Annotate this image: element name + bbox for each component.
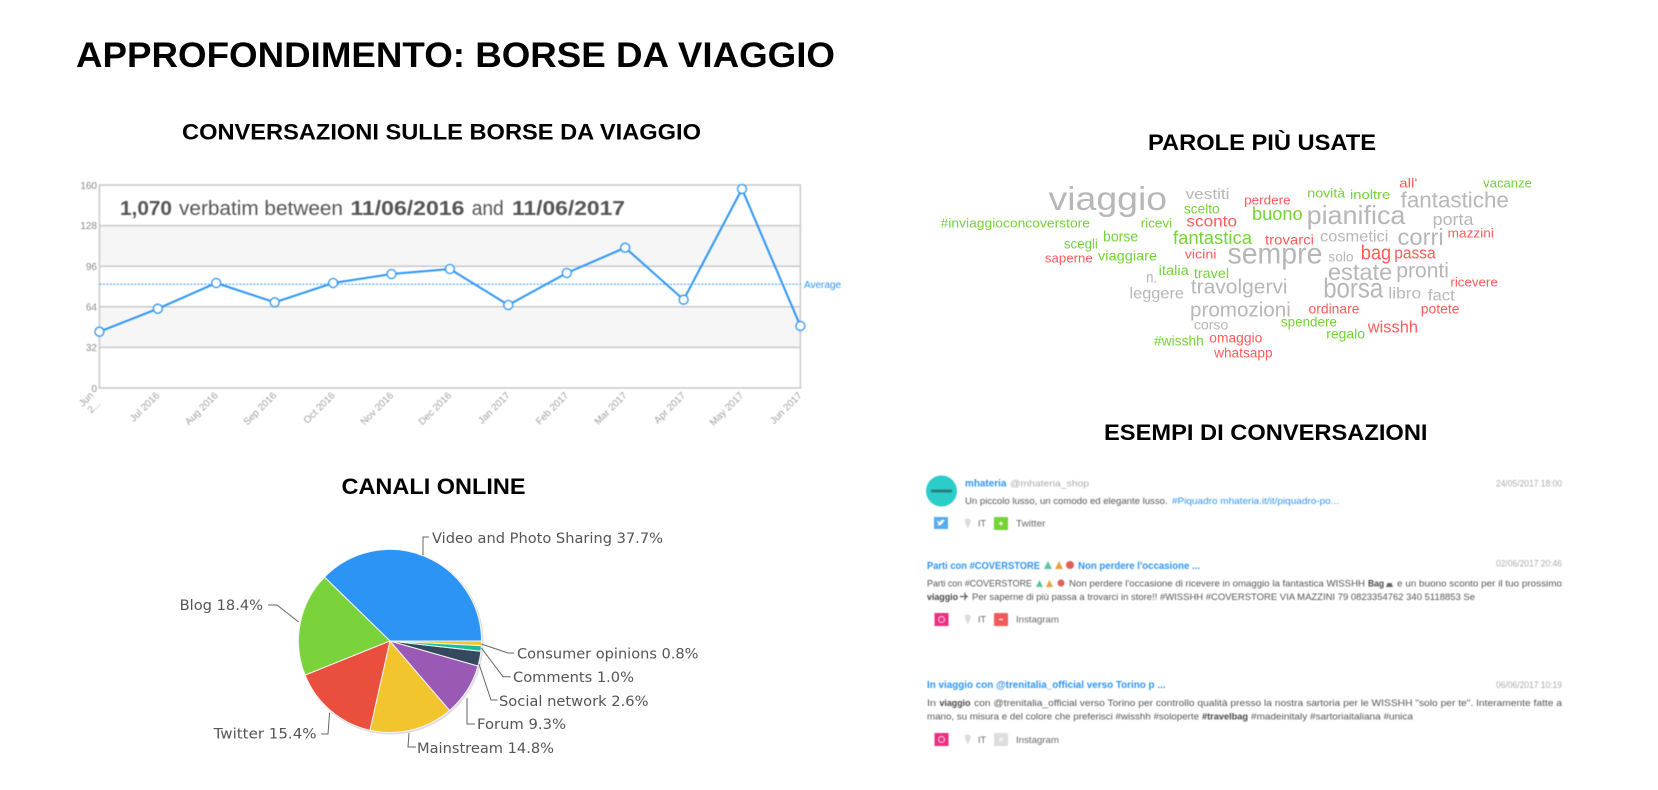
word cloud: travel: [1194, 266, 1229, 281]
chart caption: verbatim between: [179, 198, 343, 220]
word cloud: sempre: [1228, 237, 1322, 270]
heading: esempi di conversazioni: ESEMPI DI CONVERSAZIONI: [1104, 420, 1428, 445]
word cloud: porta: [1433, 210, 1474, 229]
line chart: verbatim per month: Mar 2017: [593, 390, 630, 427]
word cloud: cosmetici: [1320, 229, 1388, 246]
word cloud: passa: [1394, 244, 1436, 262]
word cloud: scelto: [1184, 201, 1220, 216]
word cloud: ricevi: [1141, 217, 1172, 231]
word cloud: whatsapp: [1213, 345, 1273, 361]
word cloud: travolgervi: [1191, 275, 1288, 298]
line chart: verbatim per month: Oct 2016: [302, 390, 338, 426]
word cloud: trovarci: [1265, 231, 1314, 247]
line chart: verbatim per month: May 2017: [708, 390, 746, 429]
conversation 3: instagram trenitalia: #madeinitaly #sartoriaitaliana #unica: [1251, 711, 1414, 722]
line chart: verbatim per month: Jun 2017: [768, 390, 805, 427]
line chart: verbatim per month: 128: [80, 221, 97, 232]
conversation 3: instagram trenitalia: mano, su misura e del colore che preferisci #wisshh #soloperte: [927, 711, 1199, 722]
word cloud: #inviaggioconcoverstore: [941, 217, 1090, 231]
icon: neutral sentiment: [994, 733, 1008, 746]
word cloud: novità: [1307, 185, 1346, 200]
icon: bag emoji: [1386, 583, 1393, 587]
chart caption: and: [472, 198, 504, 220]
line chart: verbatim per month: Sep 2016: [242, 390, 280, 428]
pie chart: online channels: [180, 531, 699, 757]
conversation 1: tweet: #Piquadro mhateria.it/it/piquadro-po...: [1172, 496, 1339, 507]
chart caption: 11/06/2016: [350, 198, 464, 220]
word cloud: pianifica: [1307, 200, 1406, 230]
line chart: verbatim per month: Average: [804, 280, 842, 291]
icon: positive sentiment: [994, 517, 1008, 530]
word cloud: vicini: [1185, 246, 1217, 261]
icon: avatar: [926, 476, 957, 506]
icon: title emojis: [1044, 561, 1074, 569]
icon: location pin: [965, 518, 971, 529]
pie chart: online channels: Mainstream 14.8%: [417, 741, 554, 757]
word cloud: fantastiche: [1401, 188, 1509, 213]
icon: body emojis: [1036, 580, 1064, 587]
conversation 2: instagram coverstore: Per saperne di più passa a trovarci in store!! #WISSHH #COVERSTORE VIA MAZZINI 79 0823354762 340 5118853 Se: [972, 592, 1475, 603]
conversation 3: instagram trenitalia: In viaggio con @trenitalia_official verso Torino p ...: [927, 680, 1166, 691]
word cloud: regalo: [1326, 325, 1365, 341]
pie chart: online channels: Video and Photo Sharing 37.7%: [432, 531, 663, 547]
word cloud: estate: [1328, 259, 1392, 285]
word cloud: corri: [1398, 224, 1444, 250]
pie chart: online channels: Comments 1.0%: [513, 670, 634, 686]
word cloud: corso: [1194, 317, 1228, 332]
line chart: verbatim per month: Nov 2016: [359, 390, 397, 428]
conversation 2: instagram coverstore: Non perdere l'occasione ...: [1078, 561, 1200, 572]
word cloud: scegli: [1064, 236, 1098, 251]
word cloud: viaggio: [1048, 180, 1167, 217]
conversation 2: instagram coverstore: Instagram: [1016, 614, 1059, 626]
pie chart: online channels: Blog 18.4%: [180, 598, 263, 614]
word cloud: omaggio: [1209, 329, 1263, 345]
conversation 3: instagram trenitalia: [927, 680, 1563, 746]
word cloud: vacanze: [1483, 176, 1532, 190]
chart caption: [120, 198, 625, 220]
heading: parole più usate: PAROLE PIÙ USATE: [1148, 130, 1376, 155]
chart caption: 1,070: [120, 198, 172, 220]
conversation 2: instagram coverstore: 02/06/2017 20:46: [1496, 558, 1562, 568]
pie chart: online channels: Consumer opinions 0.8%: [517, 647, 698, 663]
pie chart: online channels: Twitter 15.4%: [213, 727, 317, 743]
icon: negative sentiment: [994, 613, 1008, 626]
word cloud: n.: [1146, 270, 1157, 287]
icon: location pin: [965, 734, 971, 745]
word cloud: leggere: [1130, 285, 1184, 302]
word cloud: vestiti: [1186, 186, 1230, 203]
line chart: verbatim per month: 96: [86, 262, 97, 273]
word cloud: potete: [1421, 301, 1460, 316]
line chart: verbatim per month: Jan 2017: [476, 390, 513, 427]
conversation 1: tweet: [926, 476, 1562, 530]
conversation 3: instagram trenitalia: #travelbag: [1202, 711, 1248, 722]
word cloud: pronti: [1396, 259, 1449, 282]
line chart: verbatim per month: 0: [91, 384, 97, 395]
line chart: verbatim per month: 160: [80, 181, 97, 192]
icon: instagram: [934, 733, 948, 746]
word cloud: promozioni: [1190, 299, 1291, 322]
conversation 1: tweet: Twitter: [1016, 518, 1046, 530]
conversation 1: tweet: mhateria: [965, 479, 1007, 490]
conversation 2: instagram coverstore: e un buono sconto per il tuo prossimo: [1397, 579, 1562, 590]
conversation 2: instagram coverstore: IT: [978, 614, 986, 626]
word cloud: perdere: [1244, 192, 1291, 207]
line chart: verbatim per month: Feb 2017: [534, 390, 571, 427]
conversation 2: instagram coverstore: Bag: [1368, 579, 1384, 590]
heading: conversazioni: CONVERSAZIONI SULLE BORSE DA VIAGGIO: [182, 120, 701, 144]
conversation 1: tweet: IT: [978, 518, 986, 530]
word cloud: all': [1399, 176, 1417, 191]
conversation 1: tweet: 24/05/2017 18:00: [1496, 479, 1562, 489]
conversation 3: instagram trenitalia: IT: [978, 735, 986, 746]
conversation 3: instagram trenitalia: 06/06/2017 10:19: [1496, 680, 1562, 690]
word cloud: italia: [1159, 263, 1189, 278]
word cloud: #wisshh: [1154, 334, 1204, 349]
pie chart: online channels: Forum 9.3%: [477, 717, 566, 733]
word cloud: ordinare: [1308, 300, 1360, 316]
conversation 2: instagram coverstore: viaggio: [927, 592, 958, 603]
word cloud: mazzini: [1448, 225, 1494, 240]
word cloud: fact: [1428, 288, 1455, 305]
line chart: verbatim per month: Jun: [77, 390, 96, 409]
icon: plane emoji: [960, 593, 968, 600]
line chart: verbatim per month: [77, 181, 842, 429]
conversation 2: instagram coverstore: Non perdere l'occasione di ricevere in omaggio la fantastica WISSHH: [1069, 579, 1365, 590]
word cloud: saperne: [1045, 250, 1093, 265]
word cloud: wisshh: [1367, 317, 1418, 336]
line chart: verbatim per month: Apr 2017: [652, 390, 688, 426]
chart caption: 11/06/2017: [512, 198, 625, 220]
conversation 3: instagram trenitalia: Instagram: [1016, 735, 1059, 746]
word cloud: inoltre: [1350, 187, 1390, 202]
line chart: verbatim per month: 32: [86, 343, 97, 354]
word cloud: [941, 176, 1532, 361]
icon: twitter: [934, 517, 948, 529]
pie chart: online channels: Social network 2.6%: [499, 694, 648, 710]
word cloud: viaggiare: [1098, 248, 1157, 264]
conversation 1: tweet: @mhateria_shop: [1010, 479, 1089, 489]
conversation 3: instagram trenitalia: con @trenitalia_official verso Torino per controllo qualità presso la nostra sartoria per le WISSHH "solo per te". Interamente fatte a: [974, 698, 1563, 709]
conversation 2: instagram coverstore: [927, 558, 1562, 626]
word cloud: bag: [1361, 242, 1391, 264]
conversation 2: instagram coverstore: Parti con #COVERSTORE: [927, 561, 1040, 572]
word cloud: sconto: [1186, 214, 1237, 231]
word cloud: fantastica: [1173, 228, 1253, 248]
line chart: verbatim per month: 2...: [86, 398, 103, 416]
line chart: verbatim per month: Dec 2016: [417, 390, 455, 428]
line chart: verbatim per month: 64: [86, 302, 97, 314]
word cloud: borse: [1103, 230, 1138, 246]
conversation 3: instagram trenitalia: In: [927, 698, 936, 709]
word cloud: borsa: [1323, 272, 1384, 303]
line chart: verbatim per month: Jul 2016: [128, 390, 163, 424]
conversation 1: tweet: Un piccolo lusso, un comodo ed elegante lusso.: [965, 496, 1168, 507]
line chart: verbatim per month: Aug 2016: [183, 390, 221, 428]
icon: location pin: [965, 614, 971, 625]
title: APPROFONDIMENTO: BORSE DA VIAGGIO: [76, 36, 835, 75]
conversation 2: instagram coverstore: Parti con #COVERSTORE: [927, 579, 1032, 590]
heading: canali online: CANALI ONLINE: [342, 474, 526, 499]
icon: instagram: [934, 613, 948, 626]
conversation 3: instagram trenitalia: viaggio: [940, 698, 971, 709]
word cloud: spendere: [1281, 314, 1337, 330]
word cloud: solo: [1328, 250, 1354, 265]
word cloud: buono: [1252, 204, 1303, 224]
word cloud: ricevere: [1450, 275, 1498, 290]
word cloud: libro: [1388, 285, 1421, 302]
